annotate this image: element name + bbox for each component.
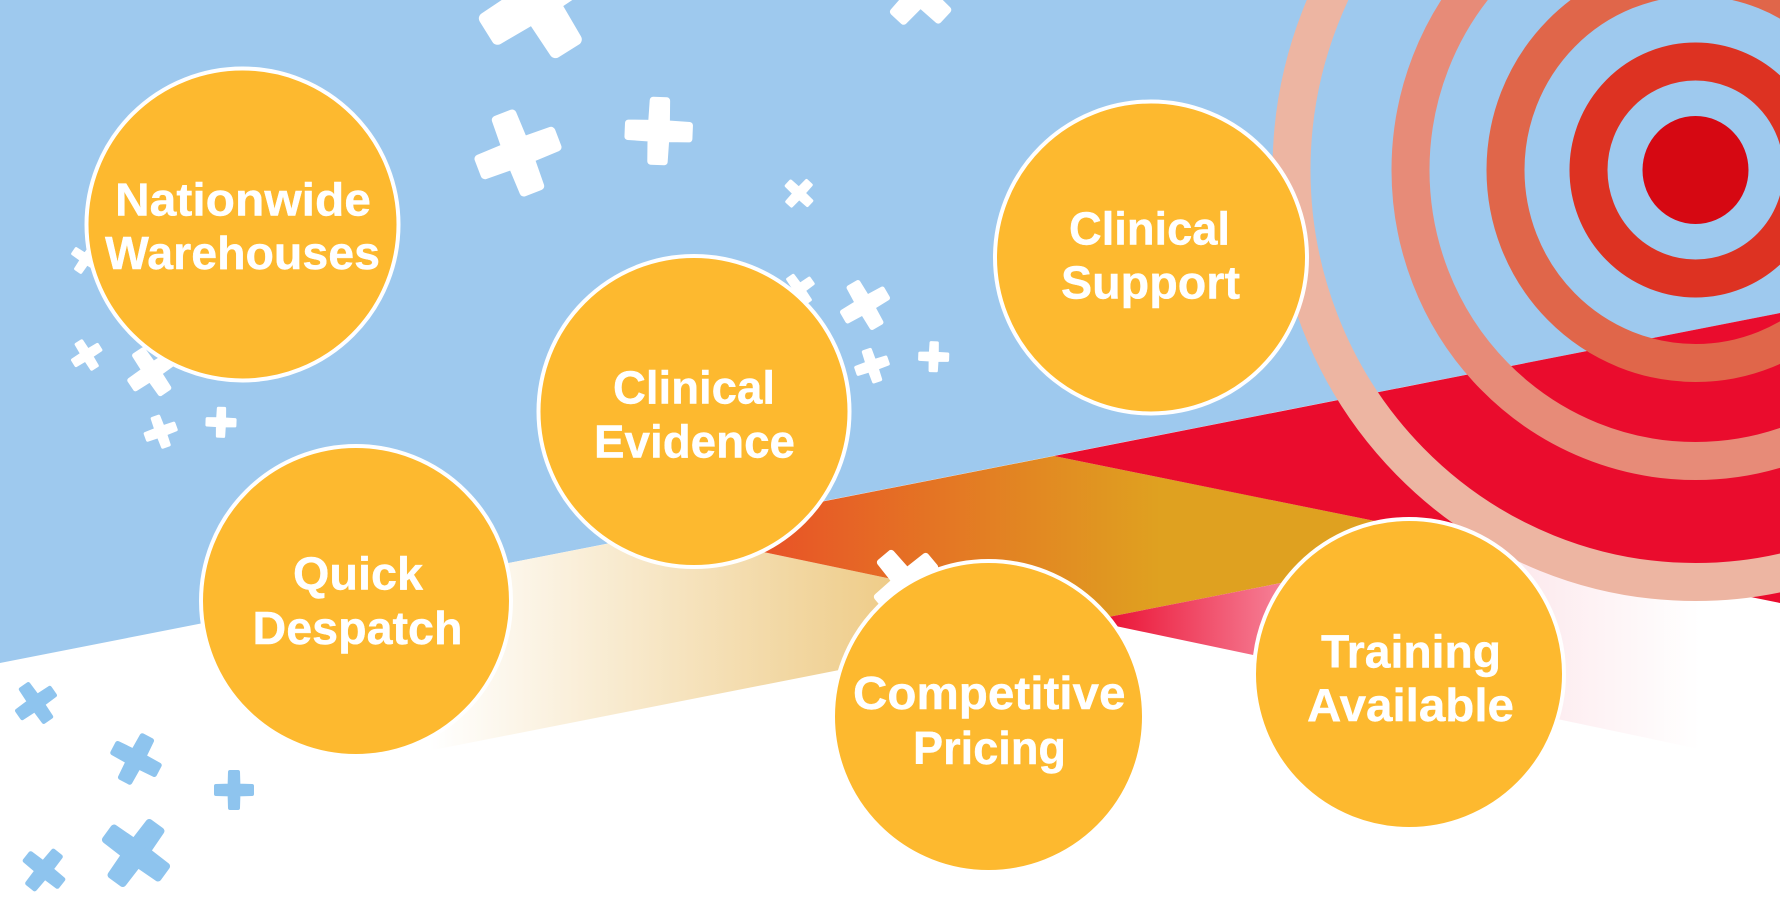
circle: Competitive Pricing: Pricing xyxy=(913,722,1066,774)
circle: Quick Despatch: Quick xyxy=(293,548,423,600)
circle: Training Available: Available xyxy=(1307,679,1514,731)
orange gradient band xyxy=(668,456,1484,621)
white crosses xyxy=(67,0,965,626)
circle: Nationwide Warehouses: Nationwide xyxy=(115,174,371,226)
red wedge xyxy=(1054,313,1780,603)
target rings xyxy=(1292,0,1780,582)
circle: Clinical Support xyxy=(995,102,1307,414)
circle: Clinical Evidence: Evidence xyxy=(594,416,795,468)
circle: Clinical Evidence: Clinical xyxy=(613,362,775,414)
pink gradient band xyxy=(1090,543,1780,766)
circle: Clinical Support: Clinical xyxy=(1069,202,1230,254)
sky background xyxy=(0,0,1780,663)
circle: Nationwide Warehouses: Warehouses xyxy=(105,227,380,279)
circle: Clinical Support: Support xyxy=(1061,256,1240,308)
circle: Clinical Evidence xyxy=(538,256,850,567)
cream gradient band xyxy=(380,532,1090,756)
circle: Training Available xyxy=(1254,519,1564,829)
blue crosses xyxy=(8,675,252,899)
circle: Training Available: Training xyxy=(1321,626,1501,678)
circle: Nationwide Warehouses xyxy=(86,68,398,380)
circle: Competitive Pricing xyxy=(833,561,1144,872)
circle: Quick Despatch xyxy=(201,446,511,756)
circle: Competitive Pricing: Competitive xyxy=(853,667,1126,719)
circle: Quick Despatch: Despatch xyxy=(252,602,462,654)
